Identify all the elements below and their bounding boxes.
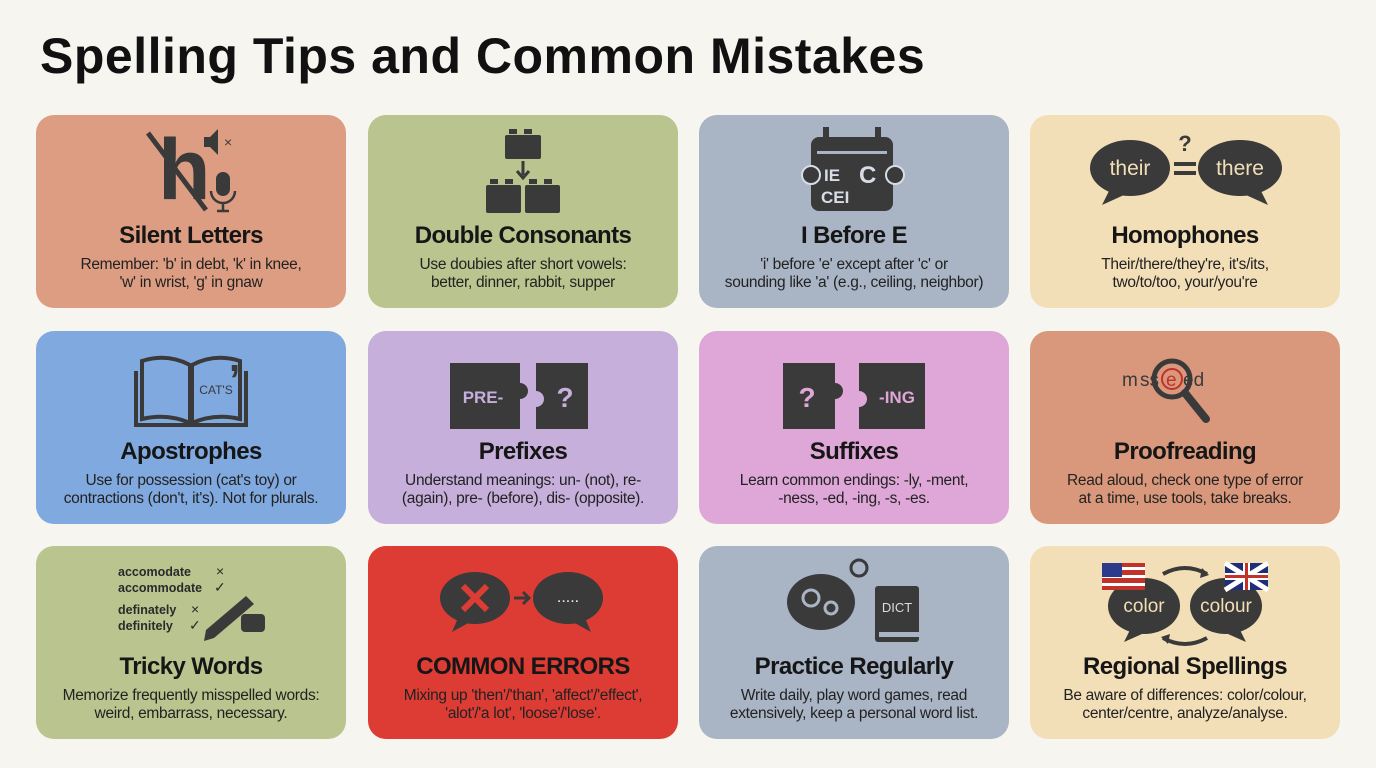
panel: double consonants <box>368 115 678 308</box>
icon: word list with pen: accommodate <box>118 581 202 595</box>
icon: word list with pen: accomodate <box>118 565 191 579</box>
panel: proofreading: Read aloud, check one type of error <box>1067 472 1303 489</box>
icon: book: CAT'S <box>199 383 233 397</box>
icon: magnifier: m <box>1122 370 1138 391</box>
panel: i before e: 'i' before 'e' except after 'c' or <box>760 256 948 273</box>
panel: homophones <box>1030 115 1340 308</box>
icon: book: , <box>229 336 240 380</box>
icon: puzzle <box>450 363 588 429</box>
icon: silent h: × <box>224 134 232 150</box>
panel: regional spellings: Regional Spellings <box>1083 653 1287 680</box>
panel: proofreading: at a time, use tools, take breaks. <box>1079 490 1291 507</box>
panel: apostrophes: Use for possession (cat's toy) or <box>86 472 296 489</box>
panel: silent letters <box>36 115 346 308</box>
panel: suffixes: -ness, -ed, -ing, -s, -es. <box>778 490 930 507</box>
icon: bubbles <box>440 572 603 632</box>
text: 'w' in wrist, 'g' in gnaw <box>119 274 263 291</box>
icon: speech bubbles: ? <box>1178 131 1192 156</box>
icon: speech bubbles <box>1090 131 1282 205</box>
panel: prefixes <box>368 331 678 524</box>
panel: practice regularly: Practice Regularly <box>755 653 953 680</box>
icon: speech bubbles: there <box>1216 157 1264 180</box>
panel: i before e: sounding like 'a' (e.g., ceiling, neighbor) <box>725 274 983 291</box>
icon: magnifier: ss <box>1140 370 1159 391</box>
icon: blocks <box>486 129 560 213</box>
icon: magnifier: e <box>1166 370 1177 391</box>
panel: double consonants: better, dinner, rabbit, supper <box>431 274 615 291</box>
icon: flags and bubbles: color <box>1123 596 1165 617</box>
icon: bubbles: ..... <box>557 589 579 606</box>
icon: puzzle: ? <box>556 382 574 413</box>
panel: homophones: two/to/too, your/you're <box>1112 274 1258 291</box>
panel: common errors: 'alot'/'a lot', 'loose'/'lose'. <box>445 705 601 722</box>
panel: suffixes <box>699 331 1009 524</box>
panel: prefixes: Prefixes <box>479 438 567 465</box>
panel: homophones: Their/there/they're, it's/its, <box>1101 256 1269 273</box>
panel: i before e: I Before E <box>801 222 907 249</box>
panel: tricky words: Tricky Words <box>119 653 263 680</box>
panel: practice regularly <box>699 546 1009 739</box>
panel: proofreading <box>1030 331 1340 524</box>
icon: word list with pen: × <box>191 601 199 617</box>
icon: flags and bubbles <box>1102 561 1270 646</box>
panel: tricky words: Memorize frequently misspelled words: <box>63 687 319 704</box>
heading: Silent Letters <box>119 222 263 249</box>
panel: tricky words: weird, embarrass, necessary. <box>95 705 287 722</box>
panel: apostrophes: contractions (don't, it's). Not for plurals. <box>64 490 318 507</box>
icon: word list with pen: definitely <box>118 619 173 633</box>
panel: suffixes: Suffixes <box>810 438 898 465</box>
icon: word list with pen <box>118 563 265 641</box>
icon: calendar: IE <box>824 166 840 185</box>
icon: magnifier: ed <box>1183 370 1204 391</box>
icon: speech bubbles: their <box>1110 157 1150 180</box>
panel: common errors: Mixing up 'then'/'than', 'affect'/'effect', <box>404 687 642 704</box>
icon: silent h: h <box>158 122 211 218</box>
icon: silent h <box>146 122 236 218</box>
panel: suffixes: Learn common endings: -ly, -ment, <box>740 472 968 489</box>
icon: book <box>134 336 248 427</box>
panel: common errors <box>368 546 678 739</box>
icon: puzzle <box>783 363 925 429</box>
icon: puzzle: PRE- <box>463 388 503 407</box>
panel: regional spellings <box>1030 546 1340 739</box>
icon: word list with pen: ✓ <box>214 579 226 595</box>
panel: common errors: COMMON ERRORS <box>416 653 630 680</box>
title: Spelling Tips and Common Mistakes <box>40 28 925 84</box>
panel: prefixes: (again), pre- (before), dis- (opposite). <box>402 490 644 507</box>
panel: practice regularly: extensively, keep a personal word list. <box>730 705 978 722</box>
panel: practice regularly: Write daily, play word games, read <box>741 687 967 704</box>
panel: regional spellings: Be aware of differences: color/colour, <box>1063 687 1307 704</box>
panel: double consonants: Double Consonants <box>415 222 631 249</box>
icon: magnifier <box>1122 358 1210 423</box>
icon: brain and dictionary: DICT <box>882 600 912 615</box>
panel: double consonants: Use doubies after short vowels: <box>420 256 626 273</box>
panel: proofreading: Proofreading <box>1114 438 1256 465</box>
panel: apostrophes <box>36 331 346 524</box>
icon: calendar: C <box>859 162 876 189</box>
icon: word list with pen: ✓ <box>189 617 201 633</box>
panel: regional spellings: center/centre, analyze/analyse. <box>1082 705 1288 722</box>
panel: homophones: Homophones <box>1111 222 1259 249</box>
icon: calendar <box>801 127 905 211</box>
panel: prefixes: Understand meanings: un- (not), re- <box>405 472 641 489</box>
panel: tricky words <box>36 546 346 739</box>
icon: puzzle: ? <box>798 382 816 413</box>
icon: word list with pen: definately <box>118 603 176 617</box>
icon: flags and bubbles: colour <box>1200 596 1253 617</box>
text <box>80 256 302 291</box>
icon: puzzle: -ING <box>879 388 915 407</box>
icon: calendar: CEI <box>821 188 849 207</box>
icon: brain and dictionary <box>787 558 919 642</box>
icon: word list with pen: × <box>216 563 224 579</box>
panel: apostrophes: Apostrophes <box>120 438 262 465</box>
panel: i before e <box>699 115 1009 308</box>
text: Remember: 'b' in debt, 'k' in knee, <box>80 256 302 273</box>
